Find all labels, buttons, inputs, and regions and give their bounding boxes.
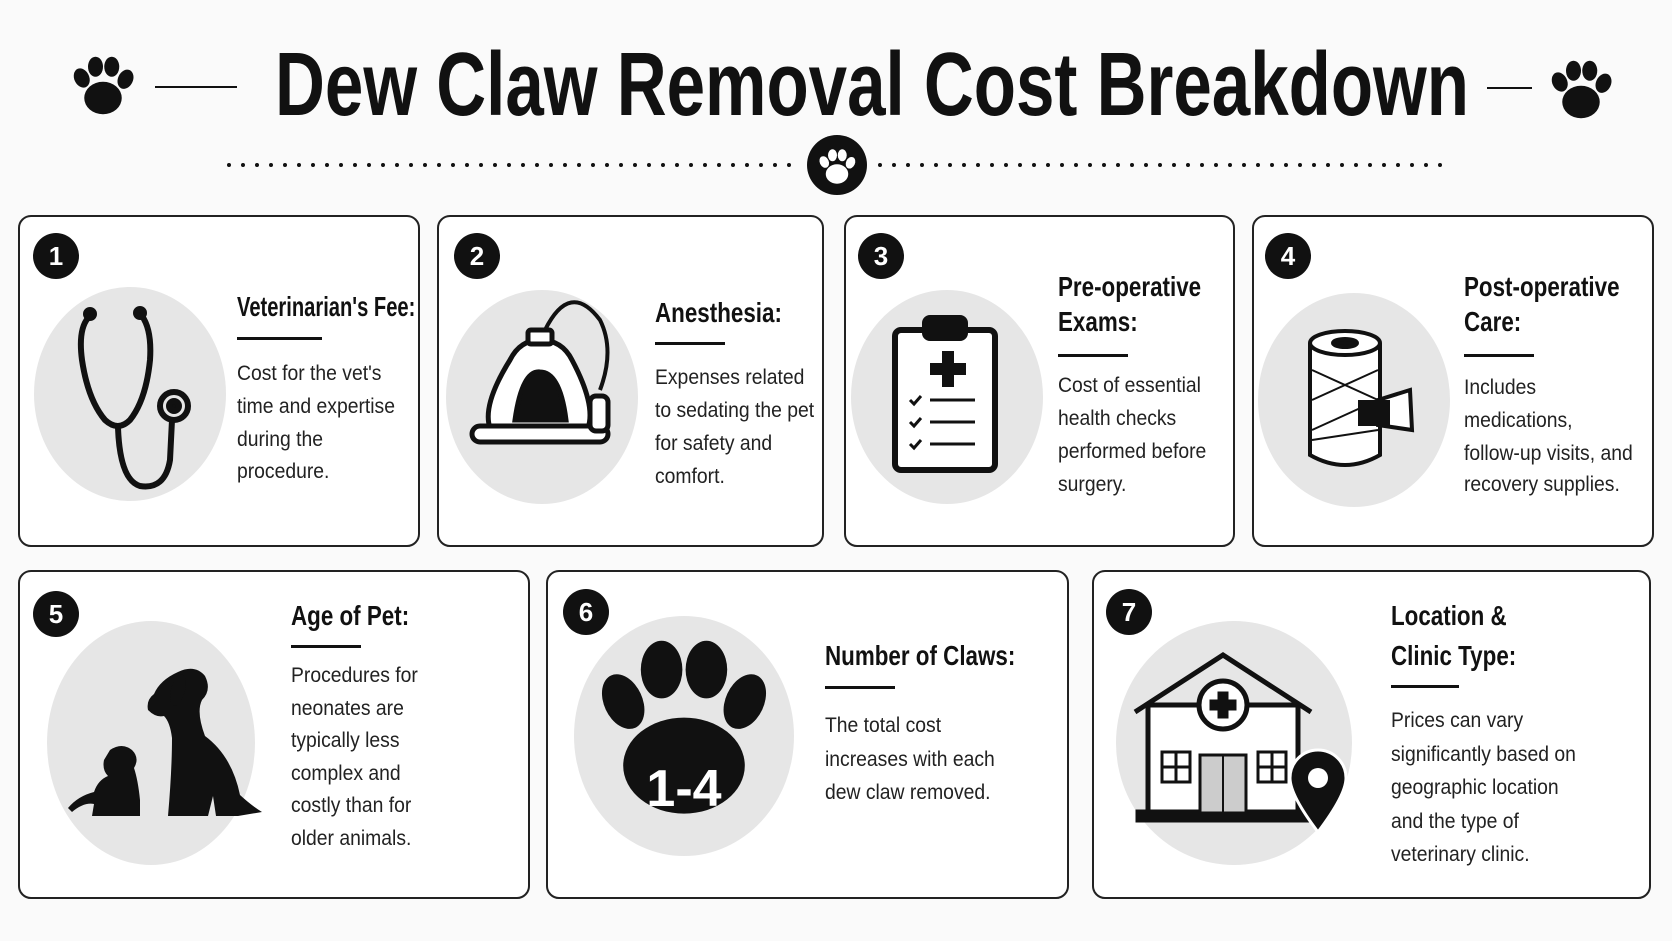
- icon: right paw: [1549, 61, 1615, 118]
- panel: veterinarian's fee: during the: [237, 427, 323, 451]
- panel: pre-operative exams: performed before: [1058, 439, 1206, 463]
- panel: location & clinic type: Clinic Type:: [1391, 641, 1516, 672]
- panel: veterinarian's fee: time and expertise: [237, 394, 395, 418]
- panel: location & clinic type: Location &: [1391, 601, 1507, 632]
- panel: number of claws: The total cost: [825, 713, 941, 737]
- icon: bandage roll: [1310, 331, 1412, 465]
- panel: post-operative care: recovery supplies.: [1464, 472, 1620, 496]
- panel: post-operative care: 4: [1281, 241, 1296, 271]
- panel: anesthesia: for safety and: [655, 431, 772, 455]
- panel: number of claws: increases with each: [825, 747, 995, 771]
- panel: veterinarian's fee: [19, 216, 419, 546]
- panel: age of pet: complex and: [291, 761, 401, 785]
- panel: age of pet: [19, 571, 529, 898]
- panel: pre-operative exams: 3: [874, 241, 888, 271]
- panel: anesthesia: to sedating the pet: [655, 398, 814, 422]
- panel: pre-operative exams: Exams:: [1058, 307, 1138, 338]
- panel: location & clinic type: [1093, 571, 1650, 898]
- icon: center paw badge: [807, 135, 867, 195]
- icon: large paw with 1-4: [594, 641, 774, 818]
- panel: location & clinic type: significantly based on: [1391, 742, 1576, 766]
- panel: veterinarian's fee: Veterinarian's Fee:: [237, 292, 415, 323]
- panel: number of claws: 6: [579, 597, 593, 627]
- icon: clipboard: [895, 318, 995, 470]
- panel: post-operative care: Care:: [1464, 307, 1521, 338]
- panel: number of claws: [547, 571, 1068, 898]
- panel: pre-operative exams: health checks: [1058, 406, 1176, 430]
- panel: anesthesia: Anesthesia:: [655, 298, 782, 329]
- panel: veterinarian's fee: procedure.: [237, 459, 329, 483]
- panel: age of pet: 5: [49, 599, 63, 629]
- panel: age of pet: costly than for: [291, 793, 412, 817]
- icon: dog and puppy: [68, 669, 262, 816]
- icon: left paw: [71, 57, 137, 114]
- panel: anesthesia: 2: [470, 241, 484, 271]
- panel: post-operative care: Includes: [1464, 375, 1536, 399]
- panel: anesthesia: [438, 216, 823, 546]
- panel: age of pet: Age of Pet:: [291, 601, 409, 632]
- panel: veterinarian's fee: 1: [49, 241, 63, 271]
- panel: veterinarian's fee: Cost for the vet's: [237, 361, 381, 385]
- panel: location & clinic type: veterinary clinic.: [1391, 842, 1530, 866]
- panel: pre-operative exams: [845, 216, 1234, 546]
- panel: location & clinic type: geographic location: [1391, 775, 1559, 799]
- panel: location & clinic type: Prices can vary: [1391, 708, 1524, 732]
- panel: post-operative care: [1253, 216, 1653, 546]
- panel: pre-operative exams: surgery.: [1058, 472, 1126, 496]
- panel: post-operative care: medications,: [1464, 408, 1573, 432]
- icon: clinic with location pin: [1135, 655, 1346, 832]
- icon: stethoscope: [81, 309, 188, 486]
- panel: pre-operative exams: Pre-operative: [1058, 272, 1201, 303]
- panel: anesthesia: comfort.: [655, 464, 725, 488]
- panel: age of pet: neonates are: [291, 696, 404, 720]
- panel: location & clinic type: 7: [1122, 597, 1136, 627]
- panel: post-operative care: follow-up visits, and: [1464, 441, 1633, 465]
- panel: age of pet: typically less: [291, 728, 400, 752]
- panel: anesthesia: Expenses related: [655, 365, 804, 389]
- panel: number of claws: Number of Claws:: [825, 641, 1015, 672]
- icon: large paw with 1-4: 1-4: [646, 760, 722, 818]
- panel: age of pet: Procedures for: [291, 663, 418, 687]
- panel: number of claws: dew claw removed.: [825, 780, 991, 804]
- panel: age of pet: older animals.: [291, 826, 411, 850]
- panel: pre-operative exams: Cost of essential: [1058, 373, 1201, 397]
- panel: post-operative care: Post-operative: [1464, 272, 1620, 303]
- icon: anesthesia mask: [472, 302, 608, 442]
- panel: location & clinic type: and the type of: [1391, 809, 1519, 833]
